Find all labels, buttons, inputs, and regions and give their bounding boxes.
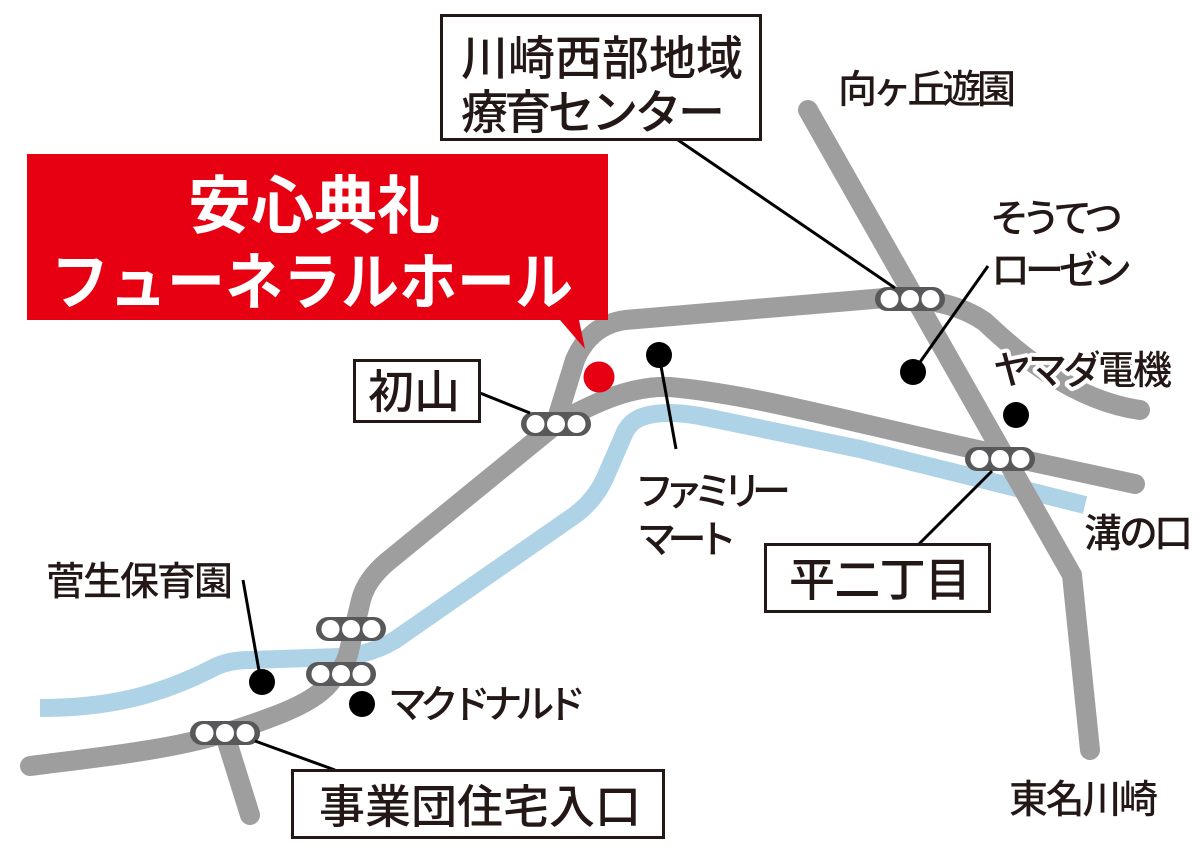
landmark dots <box>249 342 1029 717</box>
roads <box>30 110 1140 815</box>
place labels: 溝の口 <box>1084 513 1193 556</box>
label box: 川崎西部地域療育センター <box>442 16 760 140</box>
traffic signals <box>190 287 1035 745</box>
callout: funeral hall <box>27 154 608 349</box>
place labels: 向ヶ丘遊園 <box>838 69 1016 112</box>
place labels: ファミリー <box>635 471 791 514</box>
label box: 平二丁目: 平二丁目 <box>789 554 971 606</box>
river <box>40 413 1085 708</box>
place labels: マート <box>637 519 737 562</box>
place labels: ローゼン <box>991 250 1132 293</box>
label box: 初山: 初山 <box>368 366 460 418</box>
place labels: そうてつ <box>990 198 1123 241</box>
destination marker <box>584 362 614 392</box>
place labels: マクドナルド <box>388 684 586 727</box>
place labels: ヤマダ電機 <box>993 350 1172 393</box>
label box: 事業団住宅入口 <box>292 770 664 838</box>
callout: funeral hall: 安心典礼 <box>188 172 440 242</box>
label box: 川崎西部地域療育センター: 川崎西部地域 <box>461 32 743 85</box>
place labels: 菅生保育園 <box>46 561 233 604</box>
leader lines <box>243 140 992 770</box>
label box: 平二丁目 <box>766 544 990 612</box>
label box: 初山 <box>354 360 480 422</box>
label box: 川崎西部地域療育センター: 療育センター <box>461 86 725 139</box>
place labels: 東名川崎 <box>1009 779 1158 822</box>
label box: 事業団住宅入口: 事業団住宅入口 <box>319 781 641 833</box>
callout: funeral hall: フューネラルホール <box>51 249 573 318</box>
